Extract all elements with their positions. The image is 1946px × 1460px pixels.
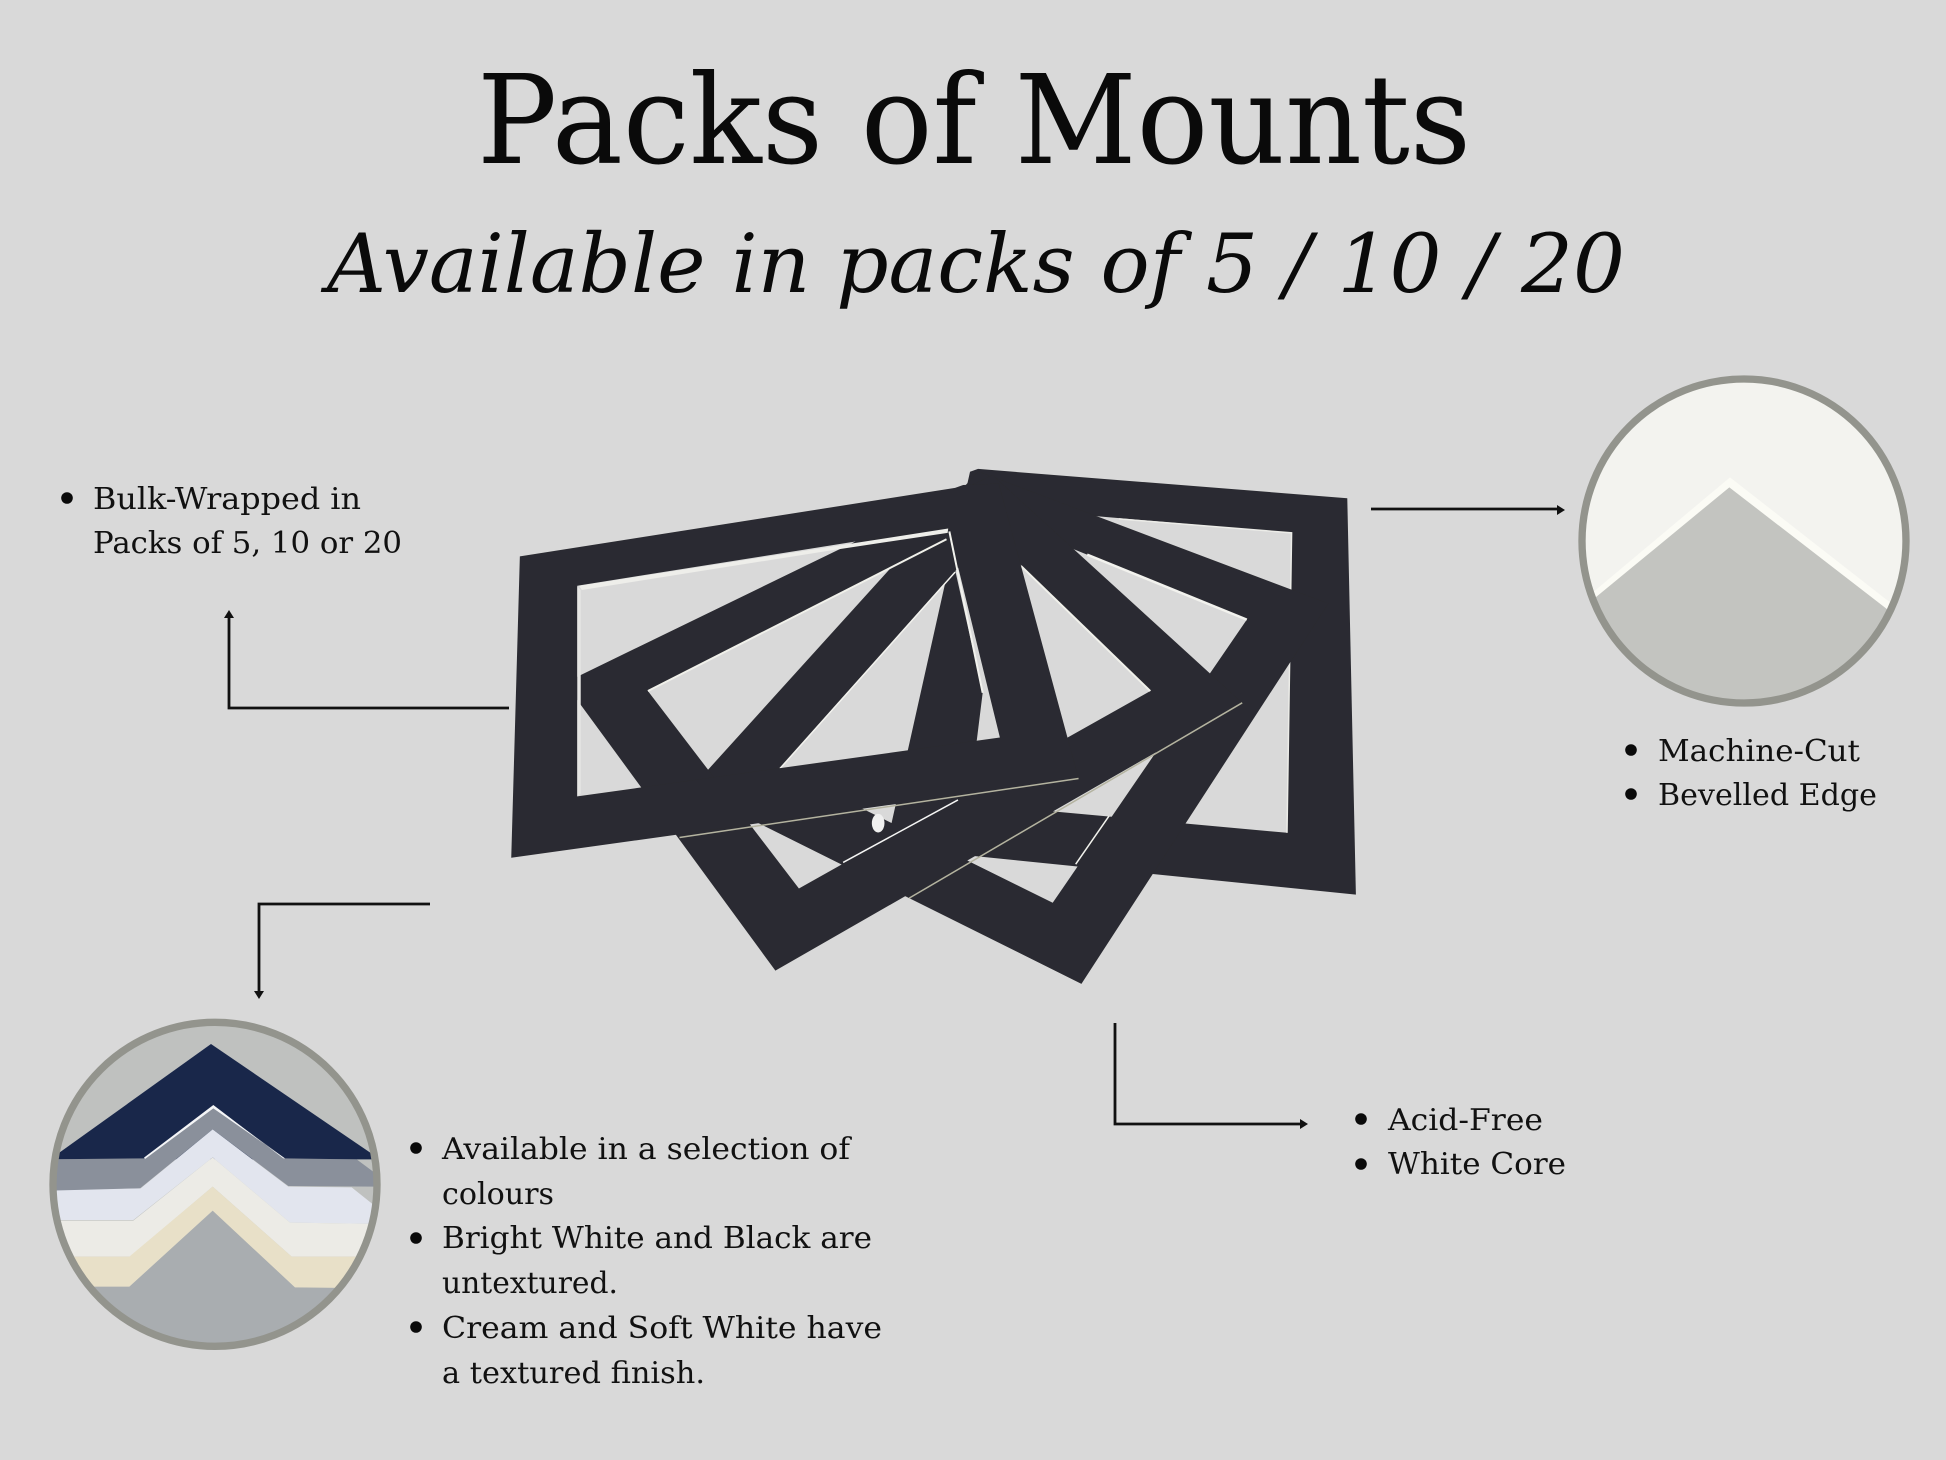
text block: acid-free: Acid-Free <box>1387 1103 1543 1138</box>
glare spot <box>872 814 884 832</box>
mount 4 (back) <box>886 469 1356 895</box>
text block: machine-cut: Bevelled Edge <box>1658 778 1877 813</box>
mount 3 <box>690 471 1328 984</box>
circle photo: colour swatches <box>47 1021 383 1353</box>
text block: bulk-wrapped: Bulk-Wrapped in <box>93 482 361 517</box>
arrow: stack to core note <box>1115 1023 1308 1129</box>
title: Packs of Mounts <box>477 49 1471 193</box>
text block: bulk-wrapped: Packs of 5, 10 or 20 <box>93 526 402 561</box>
arrow: stack to bevel detail <box>1371 505 1565 515</box>
photo: fanned stack of black mounts <box>511 469 1356 984</box>
text block: colour notes <box>410 1132 882 1391</box>
mount 2 <box>565 475 1242 971</box>
text block: colour notes: Cream and Soft White have <box>442 1311 882 1346</box>
arrow: stack to colour swatches <box>254 904 430 999</box>
text block: colour notes: a textured finish. <box>442 1356 705 1391</box>
text block: colour notes: Bright White and Black are <box>442 1221 872 1256</box>
arrow: stack to bulk-wrapped note <box>224 610 509 708</box>
text block: machine-cut: Machine-Cut <box>1658 734 1860 769</box>
text block: acid-free <box>1355 1103 1566 1182</box>
text block: machine-cut <box>1625 734 1877 813</box>
text block: acid-free: White Core <box>1388 1147 1566 1182</box>
subtitle: Available in packs of 5 / 10 / 20 <box>320 218 1625 312</box>
mount 1 (front) <box>511 484 1079 858</box>
text block: bulk-wrapped <box>61 482 402 561</box>
text block: colour notes: colours <box>442 1177 554 1212</box>
text block: colour notes: untextured. <box>442 1266 618 1301</box>
text block: colour notes: Available in a selection of <box>441 1132 852 1167</box>
circle photo: bevelled edge detail <box>1581 378 1907 713</box>
